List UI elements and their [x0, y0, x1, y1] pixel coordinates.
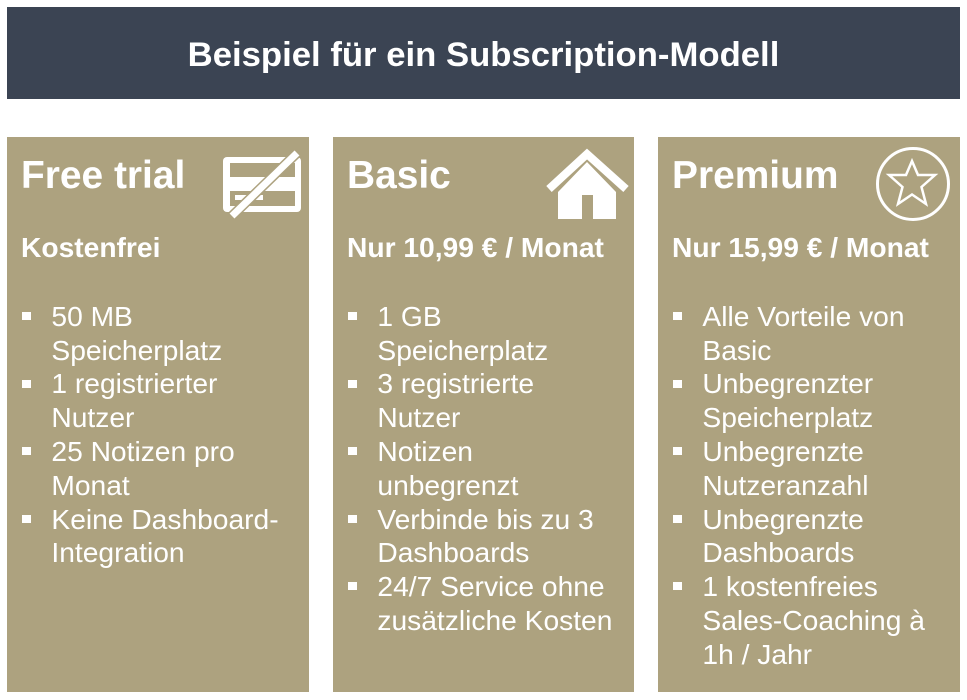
panel: free trial: [7, 137, 309, 692]
feature list: premium: Unbegrenzter: [702, 367, 873, 399]
feature list: free trial: 25 Notizen pro: [51, 435, 235, 467]
feature list: basic: Dashboards: [377, 536, 529, 568]
feature list: premium: Unbegrenzte: [702, 435, 864, 467]
feature list: basic: zusätzliche Kosten: [377, 604, 612, 636]
feature list: basic: Nutzer: [377, 401, 460, 433]
heading: basic: Basic: [347, 154, 451, 197]
feature list: free trial: Speicherplatz: [51, 334, 222, 366]
feature list: free trial: Nutzer: [51, 401, 134, 433]
panel: basic: [333, 137, 634, 692]
header banner: [7, 7, 960, 99]
feature list: basic: 24/7 Service ohne: [377, 570, 605, 602]
feature list: premium: Basic: [702, 334, 771, 366]
feature list: basic: Notizen: [377, 435, 473, 467]
feature list: free trial: Monat: [51, 469, 130, 501]
feature list: premium: Dashboards: [702, 536, 854, 568]
feature list: premium: [673, 300, 925, 670]
icon: house: [546, 148, 628, 219]
feature list: free trial: Integration: [51, 536, 185, 568]
feature list: basic: [348, 300, 612, 636]
feature list: premium: Nutzeranzahl: [702, 469, 868, 501]
icon: crossed-out credit card: [223, 150, 301, 218]
price: free trial: Kostenfrei: [21, 231, 160, 263]
feature list: basic: unbegrenzt: [377, 469, 518, 501]
feature list: basic: Verbinde bis zu 3: [377, 503, 594, 535]
feature list: premium: 1 kostenfreies: [702, 570, 878, 602]
feature list: basic: 1 GB: [377, 300, 442, 332]
heading: free trial: Free trial: [21, 154, 185, 197]
icon: star in circle: [876, 147, 950, 221]
feature list: premium: 1h / Jahr: [702, 638, 812, 670]
feature list: premium: Unbegrenzte: [702, 503, 864, 535]
feature list: free trial: 1 registrierter: [51, 367, 217, 399]
feature list: premium: Speicherplatz: [702, 401, 873, 433]
panel: premium: [658, 137, 960, 692]
price: basic: Nur 10,99 € / Monat: [347, 231, 604, 263]
price: premium: Nur 15,99 € / Monat: [672, 231, 929, 263]
feature list: free trial: 50 MB: [51, 300, 133, 332]
feature list: basic: 3 registrierte: [377, 367, 534, 399]
feature list: free trial: Keine Dashboard-: [51, 503, 279, 535]
feature list: basic: Speicherplatz: [377, 334, 548, 366]
feature list: premium: Alle Vorteile von: [702, 300, 905, 332]
heading: premium: Premium: [672, 154, 838, 197]
feature list: premium: Sales-Coaching à: [702, 604, 925, 636]
title: Beispiel für ein Subscription-Modell: [188, 36, 779, 74]
feature list: free trial: [22, 300, 279, 568]
